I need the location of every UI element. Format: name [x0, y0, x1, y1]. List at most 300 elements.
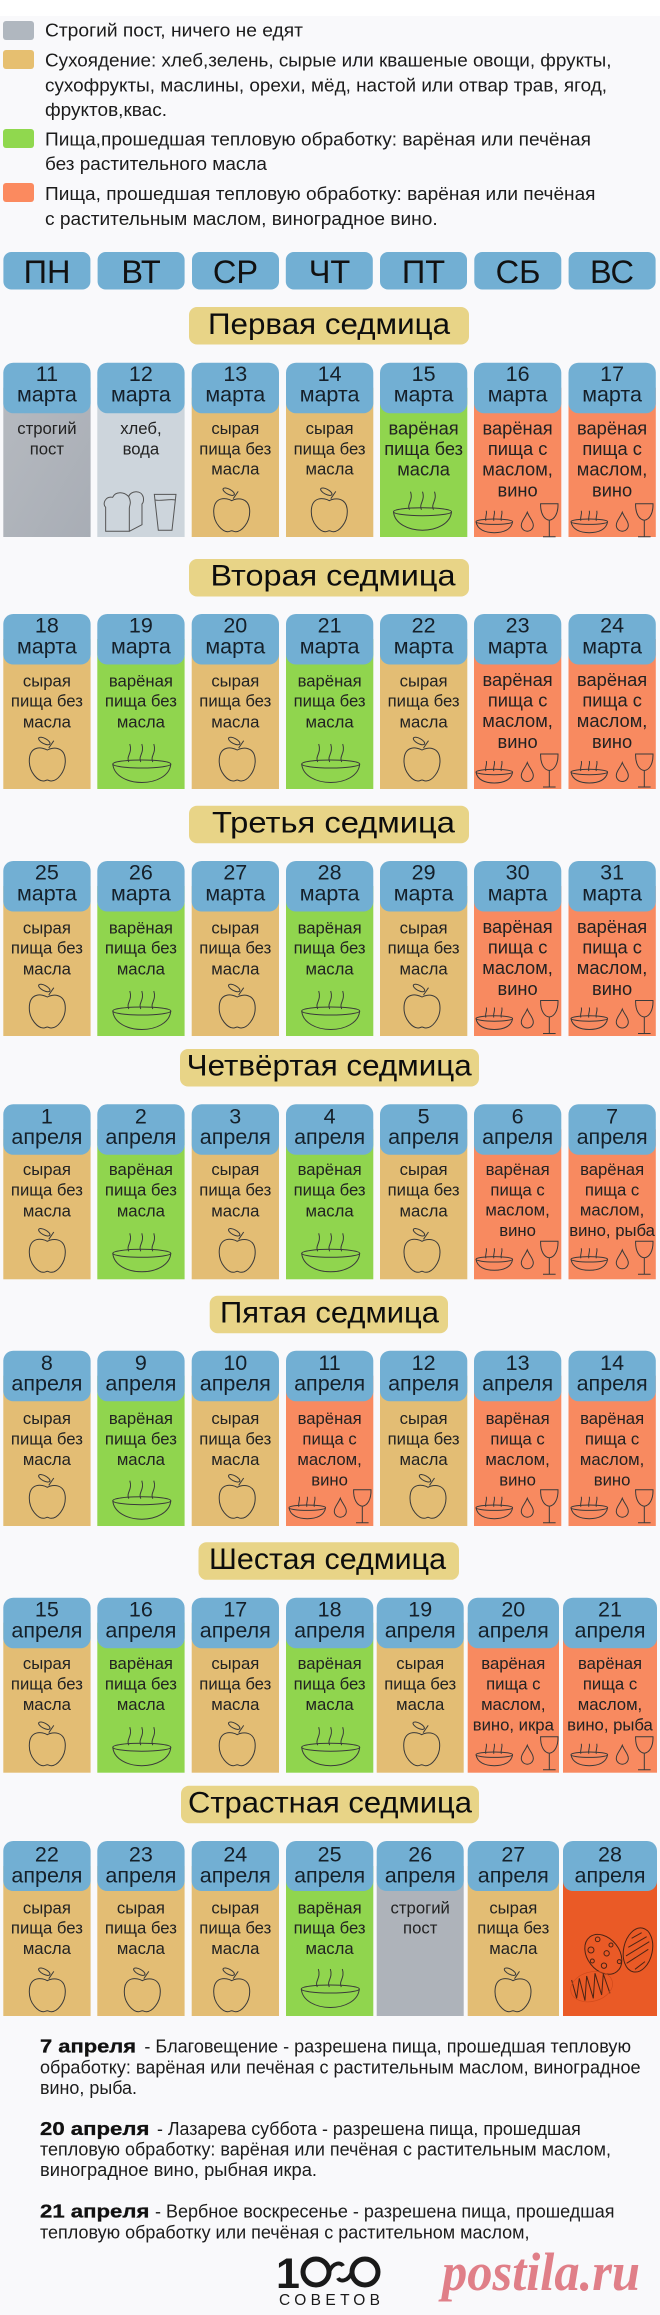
card: 15 апреля: масла — [23, 1695, 72, 1714]
legend swatch: strict fast — [3, 21, 34, 40]
card: 31 марта: пища с — [582, 936, 642, 957]
card: 21 апреля: вино, рыба — [567, 1716, 654, 1735]
card: 16 апреля: апреля — [105, 1619, 176, 1643]
card: 11 апреля: вино — [311, 1470, 348, 1489]
card: 24 марта: вино — [592, 731, 632, 752]
card: 10 апреля: пища без — [199, 1429, 272, 1448]
heading: week 7: Страстная седмица — [188, 1786, 472, 1820]
card: 12 марта: 12 — [129, 362, 153, 386]
card: 19 апреля: 19 — [408, 1598, 432, 1622]
card: 15 марта: варёная — [389, 418, 459, 439]
card: 19 апреля: масла — [396, 1695, 445, 1714]
card: 13 марта: марта — [205, 383, 265, 407]
icon: apple — [404, 736, 440, 781]
card: 26 марта: пища без — [105, 939, 177, 958]
card: 20 марта: сырая — [211, 672, 259, 691]
card: 22 марта: масла — [400, 712, 448, 731]
card: 13 апреля: вино — [499, 1470, 536, 1489]
card: 17 марта: маслом, — [577, 459, 647, 480]
card: 16 апреля: варёная — [109, 1654, 173, 1673]
card: 16 марта: маслом, — [482, 459, 553, 480]
card: 11 марта — [3, 362, 91, 537]
card: 4 апреля: варёная — [298, 1160, 362, 1179]
card: 24 апреля: масла — [211, 1939, 260, 1958]
card: 30 марта: варёная — [483, 916, 553, 937]
card: 19 марта: 19 — [129, 614, 153, 638]
icon: easter eggs — [567, 1925, 657, 2006]
icon: apple — [29, 983, 65, 1028]
card: 9 апреля: варёная — [109, 1409, 173, 1428]
icon: apple — [29, 1720, 65, 1766]
card: 27 марта: марта — [205, 881, 265, 905]
card: 17 марта — [568, 362, 656, 537]
card: 15 марта: масла — [397, 459, 451, 480]
card: 22 марта: 22 — [412, 614, 436, 638]
card: 26 апреля: апреля — [385, 1863, 456, 1887]
heading: week 4: Четвёртая седмица — [187, 1050, 472, 1083]
icon: bowl, oil, wine — [476, 1000, 558, 1034]
card: 27 марта: сырая — [211, 919, 259, 938]
card: 9 апреля: апреля — [105, 1372, 176, 1396]
card: 13 марта: 13 — [223, 362, 247, 386]
card: 25 апреля: варёная — [298, 1898, 362, 1917]
card: 13 апреля: варёная — [486, 1409, 550, 1428]
card: 23 марта: маслом, — [482, 710, 553, 731]
icon: bowl, oil, wine — [476, 1490, 558, 1523]
card: 30 марта: вино — [498, 978, 538, 999]
card: 26 марта: масла — [117, 959, 166, 978]
card: 26 марта — [97, 861, 185, 1036]
card: 23 апреля: масла — [117, 1939, 166, 1958]
card: 8 апреля: апреля — [11, 1372, 82, 1396]
card: 14 марта — [286, 362, 373, 537]
card: 25 марта: масла — [23, 959, 72, 978]
card: 17 марта: пища с — [582, 438, 642, 459]
card: 19 апреля: сырая — [396, 1654, 444, 1673]
card: 14 марта: 14 — [318, 362, 342, 386]
card: 24 марта: варёная — [577, 669, 647, 690]
tab: СР: СР — [213, 254, 258, 290]
card: 23 марта: марта — [488, 634, 548, 658]
card: 12 марта: вода — [123, 439, 160, 458]
card: 24 апреля: сырая — [211, 1898, 259, 1917]
card: 5 апреля: сырая — [400, 1160, 448, 1179]
card: 16 марта: марта — [488, 383, 548, 407]
icon: apple — [124, 1966, 160, 2012]
icon: bowl, oil, wine — [571, 1737, 653, 1770]
card: 27 апреля: сырая — [489, 1898, 537, 1917]
card: 12 марта: марта — [111, 383, 171, 407]
legend text: cooked without oil — [45, 129, 591, 174]
card: 17 марта: марта — [582, 383, 642, 407]
card: 6 апреля: вино — [499, 1221, 536, 1240]
card: 25 марта: 25 — [35, 861, 59, 885]
heading: week 6: Шестая седмица — [209, 1543, 446, 1576]
card: 21 марта: варёная — [298, 672, 362, 691]
card: 11 марта: строгий — [17, 419, 77, 438]
card: 12 апреля — [380, 1351, 467, 1526]
tab: ВТ: ВТ — [121, 254, 161, 290]
icon: bowl, oil, wine — [476, 504, 558, 537]
card: 20 апреля: 20 — [501, 1598, 525, 1622]
card: 15 марта — [380, 362, 467, 537]
card: 22 марта — [380, 614, 467, 789]
card: 14 марта: марта — [300, 383, 360, 407]
card: 24 марта: марта — [582, 634, 642, 658]
card: 19 марта — [97, 614, 185, 789]
card: 5 апреля — [380, 1104, 467, 1279]
card: 16 марта: 16 — [506, 362, 530, 386]
card: 5 апреля: апреля — [388, 1125, 459, 1149]
card: 24 апреля — [192, 1841, 279, 2016]
icon: bowl — [301, 1969, 359, 2008]
card: 12 марта: хлеб, — [120, 419, 162, 438]
card: 17 апреля: апреля — [200, 1619, 271, 1643]
card: 7 апреля: варёная — [580, 1160, 644, 1179]
heading: week 5: Пятая седмица — [220, 1296, 439, 1329]
card: 27 апреля — [468, 1841, 559, 2016]
card: 11 апреля: варёная — [298, 1409, 362, 1428]
card: 22 апреля: 22 — [35, 1843, 59, 1867]
card: 25 апреля: 25 — [318, 1843, 342, 1867]
card: 22 апреля — [3, 1841, 91, 2016]
card: 20 марта: пища без — [199, 692, 272, 711]
card: 21 марта: 21 — [318, 614, 342, 638]
card: 8 апреля: масла — [23, 1450, 72, 1469]
card: 6 апреля: маслом, — [485, 1201, 550, 1220]
icon: bread and glass of water — [104, 492, 176, 531]
card: 10 апреля — [192, 1351, 279, 1526]
card: 23 марта: 23 — [506, 614, 530, 638]
card: 20 апреля: вино, икра — [473, 1716, 555, 1735]
tab: ПН — [3, 252, 90, 290]
legend — [3, 20, 612, 229]
legend swatch: cooked without oil — [3, 129, 34, 148]
card: 1 апреля: масла — [23, 1201, 72, 1220]
heading: week 1: Первая седмица — [208, 308, 450, 341]
card: 27 апреля: масла — [489, 1939, 538, 1958]
row: week 7 — [3, 1841, 657, 2016]
card: 27 апреля: 27 — [501, 1843, 525, 1867]
card: 21 апреля: 21 — [598, 1598, 622, 1622]
legend text: cooked without oil: Пища,прошедшая тепловую обработку: варёная или печёная — [45, 129, 591, 150]
card: 24 марта — [568, 614, 656, 789]
card: 18 марта: марта — [17, 634, 77, 658]
tab: ВС — [569, 252, 656, 290]
card: 6 апреля: варёная — [486, 1160, 550, 1179]
card: 30 марта: маслом, — [482, 957, 553, 978]
icon: bowl, oil, wine — [571, 504, 653, 537]
card: 26 апреля: 26 — [408, 1843, 432, 1867]
icon: apple — [495, 1966, 531, 2012]
card: 30 марта — [474, 861, 561, 1036]
card: 11 марта: 11 — [36, 362, 58, 386]
card: 23 марта: варёная — [483, 669, 553, 690]
note: 21 апреля: - Вербное воскресенье - разрешена пища, прошедшая — [155, 2200, 614, 2221]
card: 12 апреля: 12 — [412, 1351, 436, 1375]
card: 29 марта: сырая — [400, 919, 448, 938]
card: 21 марта: марта — [300, 634, 360, 658]
card: 9 апреля: масла — [117, 1450, 166, 1469]
card: 13 марта — [192, 362, 279, 537]
card: 16 апреля: пища без — [105, 1674, 177, 1693]
card: 15 марта: 15 — [412, 362, 436, 386]
card: 14 апреля — [568, 1351, 656, 1526]
card: 18 марта — [3, 614, 91, 789]
card: 26 апреля: пост — [403, 1919, 438, 1938]
card: 3 апреля — [192, 1104, 279, 1279]
card: 7 апреля — [568, 1104, 656, 1279]
card: 12 апреля: сырая — [400, 1409, 448, 1428]
row: week 1 — [3, 362, 656, 537]
notes — [40, 2036, 641, 2242]
card: 14 апреля: пища с — [585, 1429, 639, 1448]
icon: bowl, oil, wine — [476, 754, 558, 787]
icon: apple — [29, 1473, 65, 1518]
card: 27 марта: пища без — [199, 939, 272, 958]
card: 22 апреля: сырая — [23, 1898, 71, 1917]
card: 14 апреля: 14 — [600, 1351, 624, 1375]
tab: ЧТ: ЧТ — [309, 254, 350, 290]
icon: apple — [219, 1720, 255, 1766]
card: 15 апреля: сырая — [23, 1654, 71, 1673]
card: 23 апреля: 23 — [129, 1843, 153, 1867]
card: 23 апреля: апреля — [105, 1863, 176, 1887]
card: 18 марта: пища без — [11, 692, 83, 711]
card: 17 апреля: масла — [211, 1695, 260, 1714]
card: 24 марта: 24 — [600, 614, 624, 638]
card: 14 апреля: маслом, — [580, 1450, 644, 1469]
note: 7 апреля: 7 апреля — [40, 2036, 136, 2057]
note: 21 апреля: тепловую обработку или печёная с растительном маслом, — [40, 2221, 530, 2242]
card: 16 марта — [474, 362, 561, 537]
card: 20 апреля: маслом, — [481, 1695, 546, 1714]
icon: apple — [410, 1473, 446, 1518]
icon: bowl — [113, 744, 171, 782]
card: 15 апреля: апреля — [11, 1619, 82, 1643]
card: 31 марта: 31 — [600, 861, 624, 885]
card: 1 апреля — [3, 1104, 91, 1279]
card: 24 апреля: 24 — [223, 1843, 247, 1867]
icon: bowl — [302, 991, 360, 1030]
card: 1 апреля: 1 — [41, 1104, 53, 1128]
icon: bowl — [113, 1727, 171, 1766]
card: 18 апреля: 18 — [318, 1598, 342, 1622]
card: 2 апреля — [97, 1104, 185, 1279]
card: 9 апреля: 9 — [135, 1351, 147, 1375]
card: 14 апреля: вино — [594, 1470, 630, 1489]
card: 22 апреля: апреля — [11, 1863, 82, 1887]
card: 21 апреля: апреля — [574, 1619, 646, 1643]
icon: bowl, oil, wine — [476, 1241, 558, 1274]
card: 30 марта: пища с — [488, 936, 547, 957]
card: 20 апреля: пища с — [486, 1674, 540, 1693]
card: 23 марта: вино — [498, 731, 538, 752]
card: 7 апреля: пища с — [585, 1181, 639, 1200]
card: 17 апреля: пища без — [199, 1674, 272, 1693]
card: 8 апреля: сырая — [23, 1409, 71, 1428]
card: 27 апреля: пища без — [477, 1919, 550, 1938]
card: 25 марта: марта — [17, 881, 77, 905]
card: 13 апреля: 13 — [506, 1351, 530, 1375]
card: 22 апреля: масла — [23, 1939, 72, 1958]
card: 2 апреля: варёная — [109, 1160, 173, 1179]
card: 4 апреля — [286, 1104, 373, 1279]
icon: bowl — [394, 492, 452, 530]
card: 15 марта: пища без — [384, 438, 463, 459]
card: 3 апреля: апреля — [200, 1125, 271, 1149]
card: 7 апреля: вино, рыба — [569, 1221, 656, 1240]
card: 21 марта: масла — [306, 712, 354, 731]
card: 22 апреля: пища без — [11, 1919, 83, 1938]
legend text: dry eating: сухофрукты, маслины, орехи, мёд, настой или отвар трав, ягод, — [45, 75, 607, 96]
card: 4 апреля: масла — [306, 1201, 354, 1220]
card: 16 марта: вино — [498, 480, 538, 501]
card: 24 марта: маслом, — [577, 710, 647, 731]
icon: bowl — [302, 1727, 360, 1766]
icon: bowl, oil, wine — [289, 1490, 371, 1523]
card: 4 апреля: пища без — [294, 1181, 366, 1200]
card: 29 марта: масла — [400, 959, 448, 978]
icon: apple — [404, 1227, 440, 1272]
card: 6 апреля: 6 — [512, 1104, 524, 1128]
card: 20 марта: масла — [211, 712, 260, 731]
card: 24 марта: пища с — [582, 689, 642, 710]
icon: apple — [219, 983, 255, 1028]
card: 18 апреля: варёная — [298, 1654, 362, 1673]
card: 1 апреля: пища без — [11, 1181, 83, 1200]
card: 25 апреля: апреля — [294, 1863, 365, 1887]
card: 16 марта: варёная — [483, 418, 553, 439]
card: 6 апреля: апреля — [482, 1125, 553, 1149]
card: 23 апреля: сырая — [117, 1898, 165, 1917]
card: 9 апреля: пища без — [105, 1429, 177, 1448]
weekday tabs — [3, 252, 656, 290]
card: 28 апреля — [563, 1841, 657, 2016]
card: 31 марта: варёная — [577, 916, 647, 937]
card: 28 марта: варёная — [298, 919, 362, 938]
note: 20 апреля: 20 апреля — [40, 2118, 149, 2139]
card: 11 марта: пост — [30, 439, 64, 458]
logo: 1000 советов: СОВЕТОВ — [279, 2292, 380, 2309]
card: 20 марта: марта — [205, 634, 265, 658]
card: 13 апреля — [474, 1351, 561, 1526]
legend text: dry eating: фруктов,квас. — [45, 99, 167, 120]
card: 26 апреля: строгий — [391, 1898, 450, 1917]
card: 8 апреля — [3, 1351, 91, 1526]
card: 12 апреля: пища без — [388, 1429, 460, 1448]
card: 4 апреля: апреля — [294, 1125, 365, 1149]
card: 2 апреля: пища без — [105, 1181, 177, 1200]
icon: apple — [219, 1473, 255, 1518]
card: 10 апреля: масла — [211, 1450, 260, 1469]
card: 27 марта: масла — [211, 959, 260, 978]
card: 21 апреля: варёная — [578, 1654, 642, 1673]
card: 10 апреля: 10 — [223, 1351, 247, 1375]
card: 2 апреля: 2 — [135, 1104, 147, 1128]
card: 25 апреля: масла — [306, 1939, 354, 1958]
card: 25 апреля — [286, 1841, 373, 2016]
card: 8 апреля: 8 — [41, 1351, 53, 1375]
card: 7 апреля: 7 — [606, 1104, 618, 1128]
row: week 2 — [3, 614, 656, 789]
card: 6 апреля: пища с — [490, 1181, 545, 1200]
card: 18 апреля: апреля — [294, 1619, 365, 1643]
card: 11 апреля: пища с — [302, 1429, 357, 1448]
card: 14 апреля: варёная — [580, 1409, 644, 1428]
card: 11 марта: марта — [17, 383, 77, 407]
tab: ЧТ — [286, 252, 373, 290]
card: 20 марта: 20 — [223, 614, 247, 638]
card: 27 марта: 27 — [223, 861, 247, 885]
card: 12 марта — [97, 362, 185, 537]
icon: apple — [214, 1966, 250, 2012]
legend text: cooked with oil: Пища, прошедшая тепловую обработку: варёная или печёная — [45, 183, 596, 204]
note: 21 апреля: 21 апреля — [40, 2200, 149, 2221]
card: 16 апреля: масла — [117, 1695, 166, 1714]
icon: apple — [29, 1227, 65, 1272]
legend text: cooked with oil: с растительным маслом, виноградное вино. — [45, 208, 438, 229]
card: 13 апреля: апреля — [482, 1372, 553, 1396]
top white strip — [0, 0, 660, 16]
card: 11 апреля: апреля — [294, 1372, 365, 1396]
note: 7 апреля — [40, 2036, 641, 2098]
icon: bowl — [302, 1233, 360, 1272]
card: 14 апреля: апреля — [577, 1372, 648, 1396]
card: 28 марта: пища без — [294, 939, 366, 958]
tab: ПТ — [380, 252, 467, 290]
row: week 4 — [3, 1104, 656, 1279]
icon: bowl — [113, 1233, 171, 1272]
card: 2 апреля: апреля — [105, 1125, 176, 1149]
card: 15 апреля: 15 — [35, 1598, 59, 1622]
card: 1 апреля: сырая — [23, 1160, 71, 1179]
legend text: cooked with oil — [45, 183, 596, 229]
card: 15 апреля: пища без — [11, 1674, 83, 1693]
card: 30 марта: 30 — [506, 861, 530, 885]
card: 21 марта: пища без — [294, 692, 366, 711]
icon: apple — [214, 486, 250, 532]
card: 20 апреля: апреля — [478, 1619, 549, 1643]
card: 19 марта: масла — [117, 712, 166, 731]
icon: apple — [29, 736, 65, 781]
card: 6 апреля — [474, 1104, 561, 1279]
card: 24 апреля: пища без — [199, 1919, 272, 1938]
card: 31 марта — [568, 861, 656, 1036]
row: week 3 — [3, 861, 656, 1036]
card: 25 апреля: пища без — [294, 1919, 366, 1938]
card: 28 марта: 28 — [318, 861, 342, 885]
card: 19 марта: варёная — [109, 672, 173, 691]
tab: СБ — [474, 252, 561, 290]
card: 16 апреля — [97, 1598, 185, 1773]
card: 21 марта — [286, 614, 373, 789]
card: 17 марта: вино — [592, 480, 632, 501]
note: 7 апреля: - Благовещение - разрешена пища, прошедшая тепловую — [144, 2036, 631, 2057]
card: 18 апреля: пища без — [294, 1674, 366, 1693]
card: 31 марта: вино — [592, 978, 632, 999]
card: 19 марта: пища без — [105, 692, 177, 711]
card: 29 марта — [380, 861, 467, 1036]
legend text: cooked without oil: без растительного масла — [45, 153, 268, 174]
tab: ВТ — [98, 252, 185, 290]
heading: week 2: Вторая седмица — [210, 560, 456, 593]
card: 5 апреля: 5 — [418, 1104, 430, 1128]
card: 22 марта: марта — [394, 634, 454, 658]
card: 5 апреля: пища без — [388, 1181, 460, 1200]
card: 23 апреля: пища без — [105, 1919, 177, 1938]
card: 26 марта: 26 — [129, 861, 153, 885]
